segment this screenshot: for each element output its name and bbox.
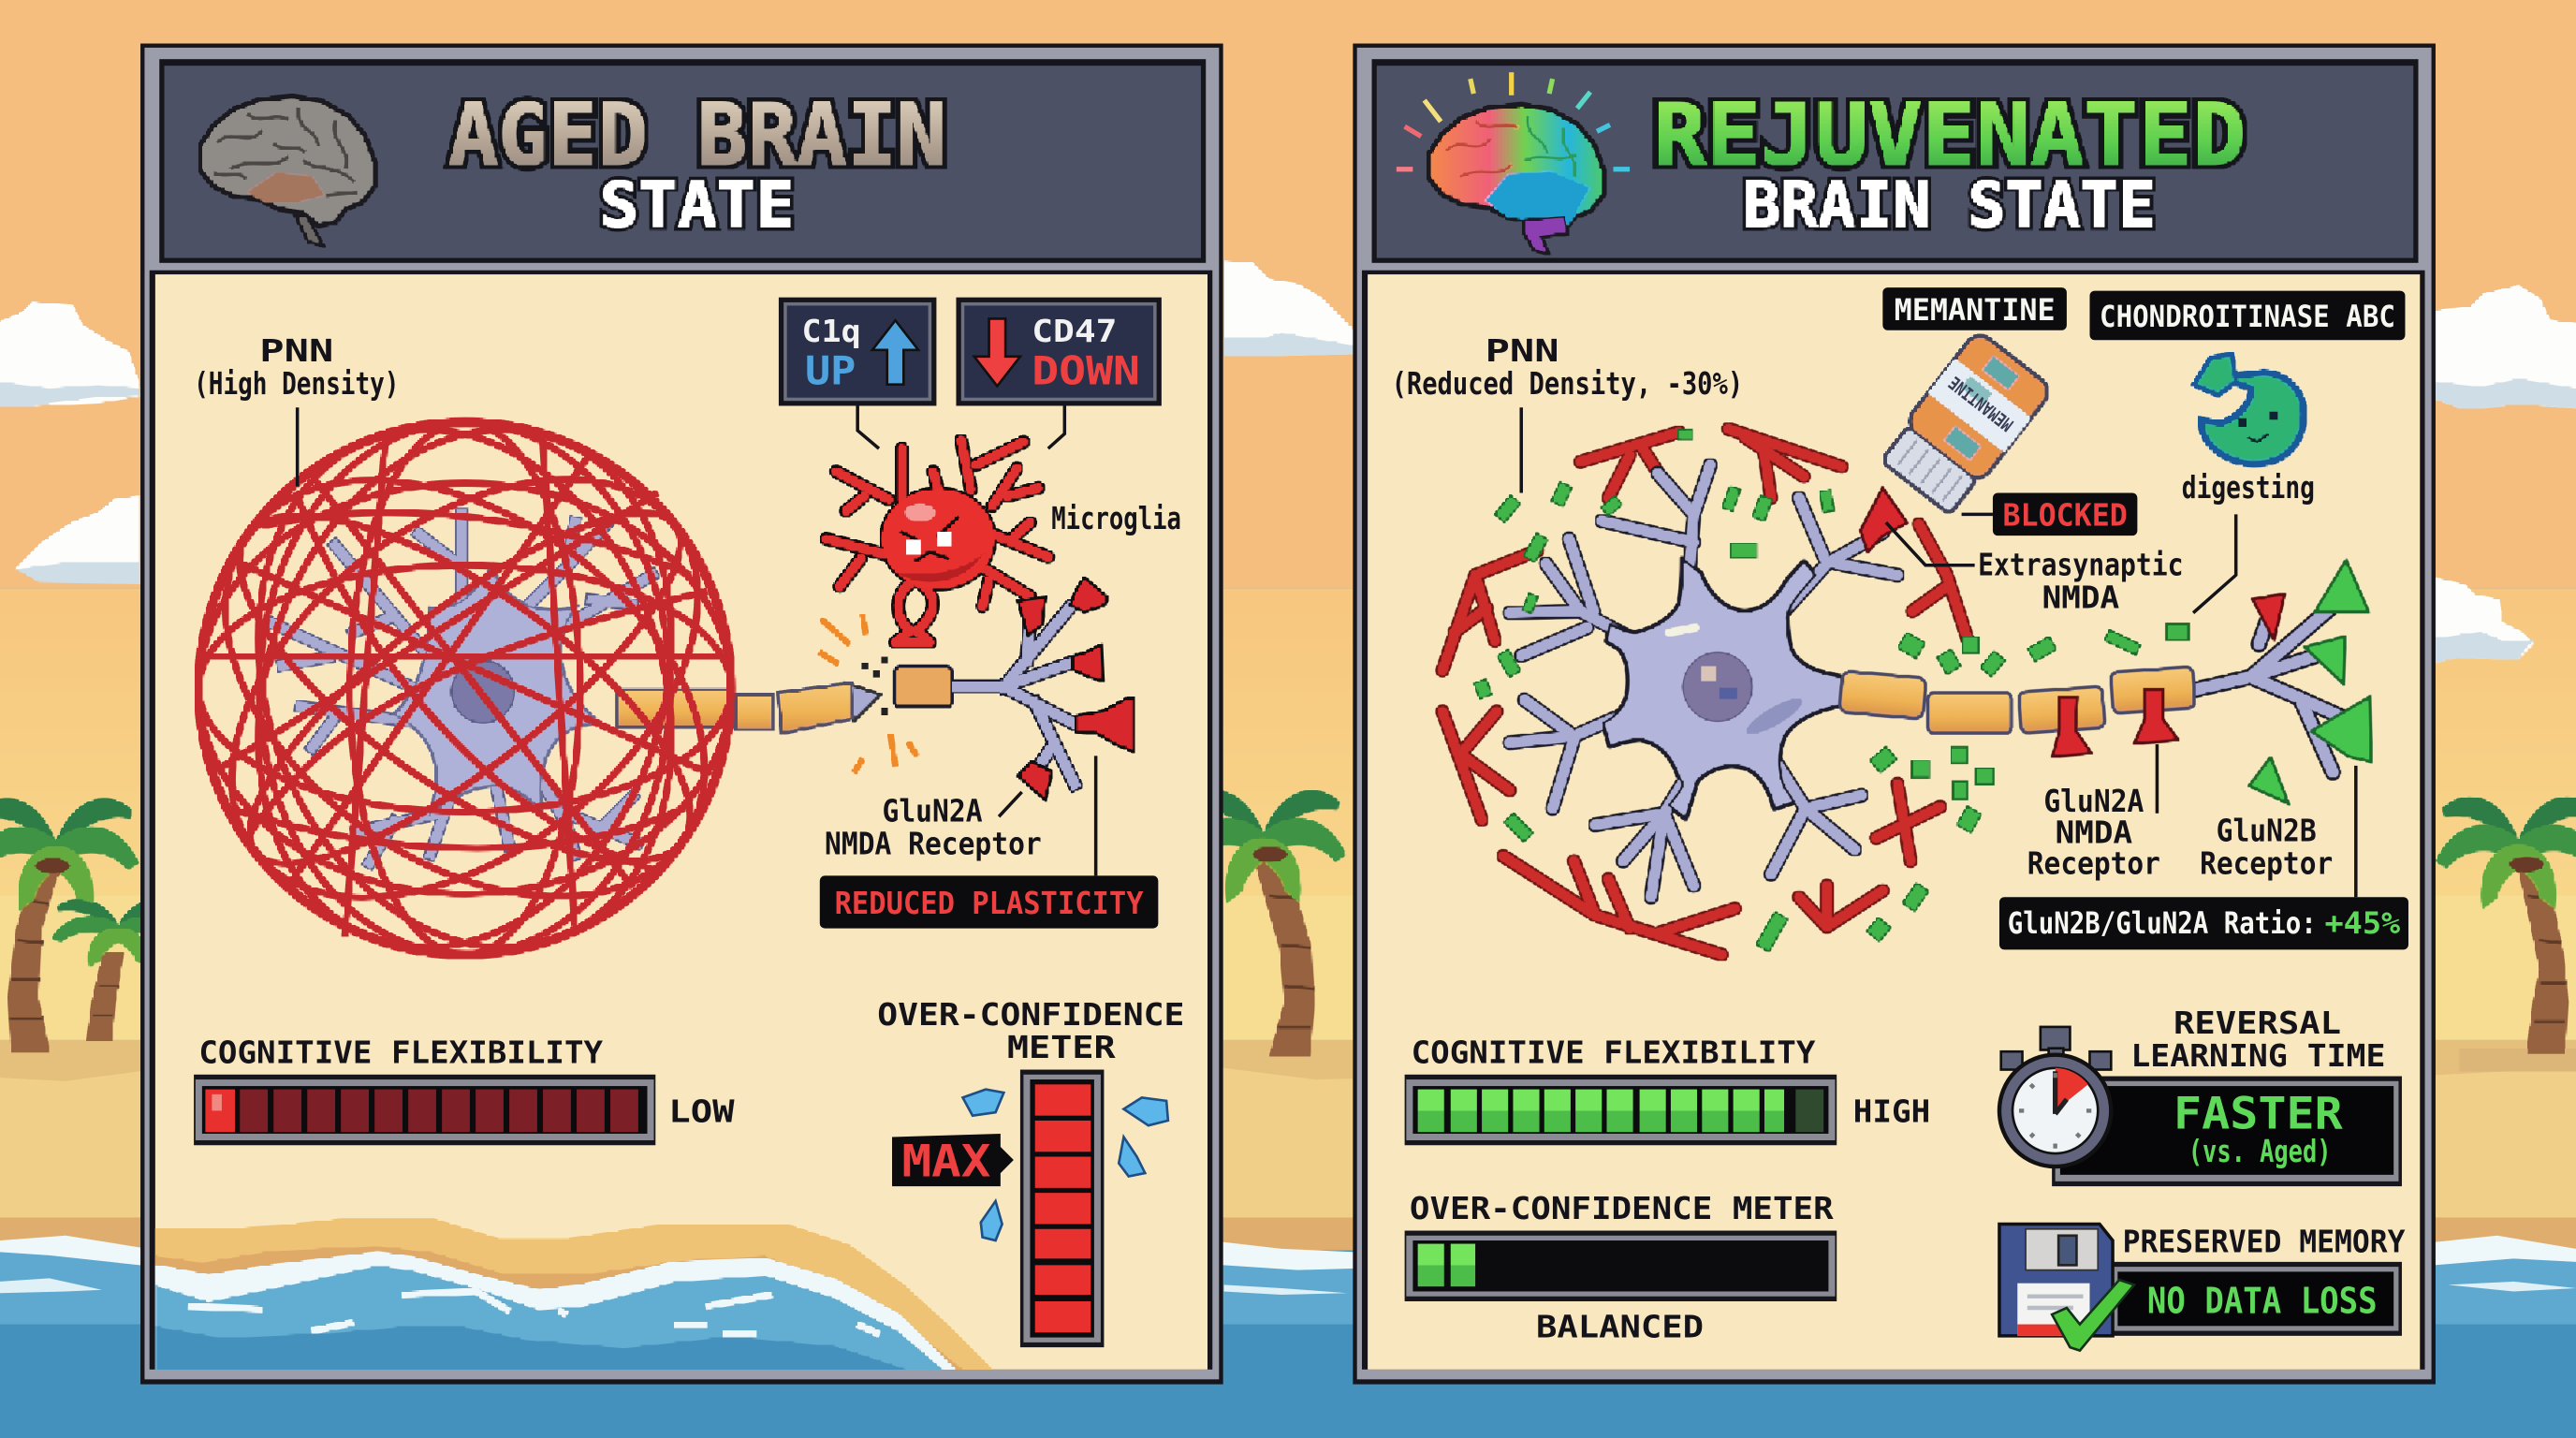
badge: CD47 down: [956, 298, 1162, 405]
extrasynaptic NMDA label: [1886, 522, 2184, 615]
PNN label: PNN: [259, 332, 333, 369]
GluN2B label: [2200, 766, 2356, 897]
neuron cell: [1510, 465, 2363, 897]
break sparks: [820, 614, 916, 772]
myelin sheath segments: [1840, 668, 2194, 733]
PNN label: PNN: [1486, 332, 1559, 369]
preserved memory: PRESERVED MEMORY: [2123, 1223, 2405, 1259]
panel: aged brain state: [140, 44, 1223, 1385]
icon: stopwatch: [1999, 1027, 2111, 1167]
icon: floppy disk with check: [1999, 1224, 2134, 1351]
axon segments before break: [618, 683, 879, 733]
drug label: memantine: MEMANTINE: [1895, 294, 2056, 328]
receptor label: NMDA Receptor: [825, 826, 1042, 862]
panel frame: [1353, 44, 2436, 1385]
GluN2A label: Receptor: [2027, 845, 2160, 882]
GluN2A label: [2027, 744, 2160, 882]
header: aged brain: [200, 85, 946, 244]
icon: pill bottle: MEMANTINE: [1944, 372, 2017, 435]
callout: ratio: [1999, 897, 2408, 949]
digesting label: digesting: [2182, 469, 2315, 506]
reversal learning time: FASTER: [2174, 1089, 2343, 1140]
badge: C1q up: UP: [805, 348, 856, 394]
drug label: memantine: [1882, 287, 2067, 330]
extrasynaptic NMDA label: Extrasynaptic: [1978, 546, 2184, 582]
PNN label: (Reduced Density, -30%): [1392, 365, 1743, 402]
drug label: chondroitinase abc: CHONDROITINASE ABC: [2100, 301, 2395, 334]
cognitive flexibility high: HIGH: [1853, 1093, 1930, 1130]
broken axon and dendrite tree: [896, 608, 1076, 784]
subtitle: BRAIN STATE: [1743, 169, 2156, 242]
over-confidence meter balanced: BALANCED: [1536, 1309, 1704, 1345]
icon: grey brain: [200, 97, 374, 244]
reversal learning time: LEARNING TIME: [2130, 1037, 2385, 1074]
badge leaders: [857, 405, 1064, 448]
over-confidence meter balanced: [1405, 1190, 1837, 1345]
neuron inside net: [271, 514, 652, 862]
callout: reduced plasticity: REDUCED PLASTICITY: [835, 885, 1144, 921]
badge: C1q up: [779, 298, 936, 405]
GluN2B label: GluN2B: [2217, 813, 2317, 849]
GluN2B label: Receptor: [2200, 845, 2333, 882]
PNN label: (High Density): [194, 365, 399, 402]
title: AGED BRAIN: [448, 85, 946, 185]
panel: rejuvenated brain state: [1353, 44, 2436, 1385]
digested green fragments: [1475, 431, 2188, 951]
icon: rainbow brain: [1429, 105, 1603, 253]
beach inset: [156, 1219, 990, 1369]
callout: ratio: GluN2B/GluN2A Ratio:: [2008, 907, 2317, 941]
palm trees: [0, 0, 2576, 1071]
GluN2A label: NMDA: [2056, 814, 2132, 850]
preserved memory: NO DATA LOSS: [2147, 1280, 2378, 1322]
cognitive flexibility low: [194, 1034, 736, 1145]
reversal learning time: (vs. Aged): [2188, 1133, 2331, 1169]
reversal learning time: REVERSAL: [2174, 1005, 2341, 1041]
badge: CD47 down: CD47: [1032, 313, 1117, 349]
icon: brain rays: [1397, 72, 1630, 169]
subtitle: STATE: [600, 169, 795, 242]
drug label: chondroitinase abc: [2089, 291, 2405, 340]
cognitive flexibility high: COGNITIVE FLEXIBILITY: [1412, 1034, 1815, 1071]
receptor label: GluN2A: [882, 793, 983, 829]
GluN2A label: GluN2A: [2043, 783, 2144, 819]
extrasynaptic NMDA label: NMDA: [2042, 579, 2119, 615]
header: rejuvenated brain: [1397, 72, 2246, 253]
PNN fragments: [1442, 429, 1969, 955]
microglia: [827, 440, 1048, 642]
PNN label: [194, 332, 399, 486]
title: REJUVENATED: [1653, 85, 2246, 185]
over-confidence meter max: MAX: [902, 1137, 990, 1188]
cognitive flexibility low: COGNITIVE FLEXIBILITY: [198, 1034, 603, 1071]
badge: CD47 down: DOWN: [1032, 348, 1140, 394]
icon: pill bottle: [1879, 330, 2053, 517]
receptor cones red: [1018, 579, 1134, 799]
cognitive flexibility high: [1405, 1034, 1930, 1145]
PNN net sphere: [148, 371, 782, 1006]
over-confidence meter max: OVER-CONFIDENCE: [877, 996, 1184, 1033]
reversal learning time: [2052, 1005, 2402, 1186]
digesting label: [2182, 469, 2315, 613]
clouds: [0, 261, 2576, 662]
panel frame: [140, 44, 1223, 1385]
callout: blocked: BLOCKED: [2002, 497, 2128, 534]
cognitive flexibility low: LOW: [668, 1093, 736, 1130]
PNN label: [1392, 332, 1743, 493]
receptor cones: [1862, 490, 2371, 801]
receptor label: [825, 756, 1096, 875]
badge: C1q up: C1q: [801, 313, 861, 349]
over-confidence meter max: [877, 996, 1184, 1347]
callout: ratio: +45%: [2324, 907, 2400, 941]
preserved memory: [2110, 1223, 2405, 1336]
callout: reduced plasticity: [820, 875, 1158, 929]
over-confidence meter balanced: OVER-CONFIDENCE METER: [1410, 1190, 1835, 1226]
icon: enzyme: [2195, 355, 2304, 463]
over-confidence meter max: METER: [1007, 1029, 1117, 1065]
callout: blocked: [1962, 493, 2137, 536]
microglia label: Microglia: [1051, 500, 1181, 536]
